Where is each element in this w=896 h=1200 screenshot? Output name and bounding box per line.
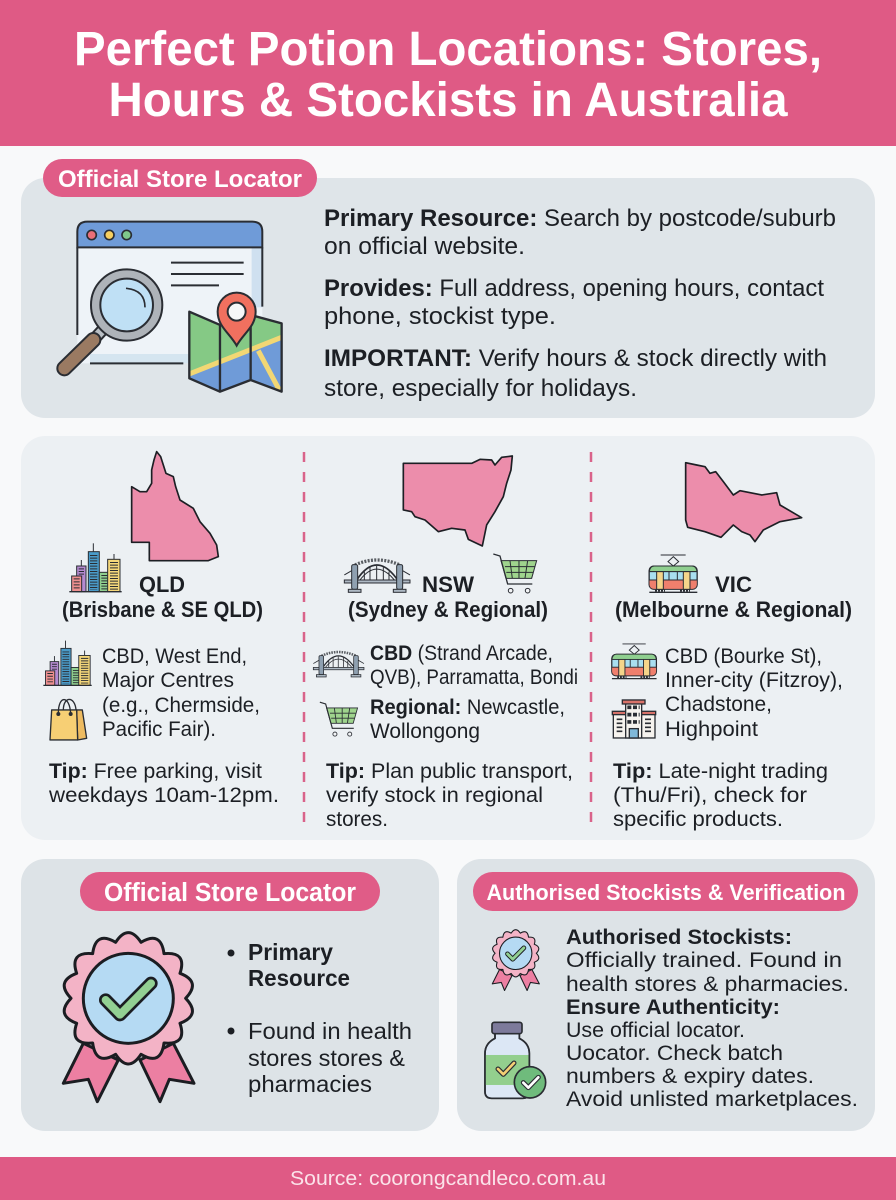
heading: QLD: (Brisbane & SE QLD) — [62, 597, 263, 622]
text block: stockists details — [566, 925, 858, 1111]
text: QLD locations: CBD, West End, — [102, 644, 247, 668]
text: QLD tip: weekdays 10am-12pm. — [48, 783, 279, 807]
pill heading: authorised stockists and verification: Authorised Stockists & Verification — [486, 880, 846, 905]
text block: stockists details: numbers & expiry dates. — [566, 1064, 814, 1088]
text: NSW tip: stores. — [326, 807, 388, 831]
column: VIC — [612, 463, 852, 831]
text block: stockists details: health stores & pharmacies. — [566, 972, 849, 996]
title — [74, 23, 822, 127]
icon: tram — [649, 555, 697, 592]
map: Victoria — [686, 463, 802, 542]
panel: state breakdown — [21, 436, 875, 840]
text block: locator details: Primary Resource: Search by postcode/suburb — [324, 205, 836, 232]
text: QLD locations: Pacific Fair). — [102, 717, 216, 741]
column: NSW — [313, 456, 578, 831]
icon: supplement bottle with check — [485, 1022, 546, 1098]
heading: NSW: (Sydney & Regional) — [348, 597, 548, 622]
heading: VIC — [615, 572, 852, 622]
text: VIC locations: Inner-city (Fitzroy), — [665, 668, 843, 692]
icon: city skyline small — [43, 641, 92, 685]
map: New South Wales — [403, 456, 512, 546]
pill heading: official store locator: Official Store Locator — [58, 166, 302, 193]
text block: locator details: IMPORTANT: Verify hours & stock directly with — [324, 345, 827, 372]
text block: locator details: store, especially for holidays. — [324, 375, 637, 402]
bullet list: Found in health — [248, 1018, 412, 1044]
text block: stockists details: Avoid unlisted marketplaces. — [566, 1087, 858, 1111]
text: NSW locations — [370, 641, 578, 743]
text: QLD locations: Major Centres — [102, 668, 234, 692]
text: VIC locations: Chadstone, — [665, 692, 772, 716]
text: QLD locations — [102, 644, 260, 741]
heading: QLD — [62, 572, 263, 622]
text: NSW tip: Tip: Plan public transport, — [326, 759, 573, 783]
icon: shopping cart small — [320, 702, 358, 736]
pill heading: official store locator: Official Store Locator — [104, 879, 356, 907]
text block: stockists details: Officially trained. Found in — [566, 948, 842, 972]
text: QLD tip: Tip: Free parking, visit — [49, 759, 262, 783]
bullet list: Primary — [248, 939, 333, 965]
map: Queensland — [132, 452, 218, 561]
icon: city skyline — [69, 543, 122, 592]
icon: shopping bag — [50, 699, 87, 740]
text block: locator details: phone, stockist type. — [324, 303, 556, 330]
footer: source: Source: coorongcandleco.com.au — [290, 1167, 606, 1190]
icon: harbour bridge — [344, 560, 410, 592]
text: NSW tip — [326, 759, 573, 831]
icon: tram small — [612, 644, 657, 679]
pill heading: authorised stockists and verification — [473, 872, 858, 911]
text: QLD tip — [48, 759, 279, 807]
icon: apartment building — [612, 700, 656, 738]
bullet list: Resource — [248, 965, 350, 991]
panel: authorised stockists and verification — [457, 859, 875, 1131]
icon: browser with magnifier and map pin — [64, 222, 282, 392]
text block: locator details — [324, 205, 836, 402]
text: NSW locations: Regional: Newcastle, — [370, 695, 565, 719]
text: VIC tip: (Thu/Fri), check for — [613, 783, 807, 807]
footer: source — [0, 1157, 896, 1200]
icon: small award rosette — [492, 930, 539, 990]
panel: official store locator — [21, 159, 875, 418]
text: NSW locations: QVB), Parramatta, Bondi — [370, 665, 578, 689]
panel: official store locator summary — [21, 859, 439, 1131]
text block: stockists details: Authorised Stockists: — [566, 925, 792, 949]
title: Perfect Potion Locations: Stores, — [74, 23, 822, 76]
pill heading: official store locator — [80, 872, 380, 911]
heading: NSW — [348, 572, 548, 622]
text: VIC locations: CBD (Bourke St), — [665, 644, 822, 668]
text: VIC tip: specific products. — [613, 807, 783, 831]
text: VIC tip — [613, 759, 828, 831]
text: QLD locations: (e.g., Chermside, — [102, 693, 260, 717]
text block: stockists details: Use official locator. — [566, 1018, 745, 1042]
header banner — [0, 0, 896, 146]
text block: locator details: Provides: Full address, opening hours, contact — [324, 275, 824, 302]
text: VIC tip: Tip: Late-night trading — [613, 759, 828, 783]
text: NSW locations: Wollongong — [370, 719, 480, 743]
pill heading: official store locator — [43, 159, 317, 197]
text block: stockists details: Uocator. Check batch — [566, 1041, 783, 1065]
heading: VIC: VIC — [715, 572, 752, 597]
bullet list — [228, 939, 412, 1097]
icon: shopping cart — [493, 554, 537, 593]
icon: award rosette with check — [63, 933, 194, 1102]
text: VIC locations — [665, 644, 843, 741]
heading: VIC: (Melbourne & Regional) — [615, 597, 852, 622]
text: VIC locations: Highpoint — [665, 717, 758, 741]
text block: locator details: on official website. — [324, 233, 525, 260]
column: QLD — [43, 452, 279, 807]
text: NSW tip: verify stock in regional — [326, 783, 543, 807]
icon: harbour bridge small — [313, 652, 364, 677]
text block: stockists details: Ensure Authenticity: — [566, 995, 780, 1019]
heading: QLD: QLD — [139, 572, 185, 597]
bullet list: pharmacies — [248, 1071, 372, 1097]
bullet list: stores stores & — [248, 1045, 405, 1071]
text: NSW locations: CBD (Strand Arcade, — [370, 641, 553, 665]
heading: NSW: NSW — [422, 572, 474, 597]
title: Hours & Stockists in Australia — [108, 74, 788, 127]
